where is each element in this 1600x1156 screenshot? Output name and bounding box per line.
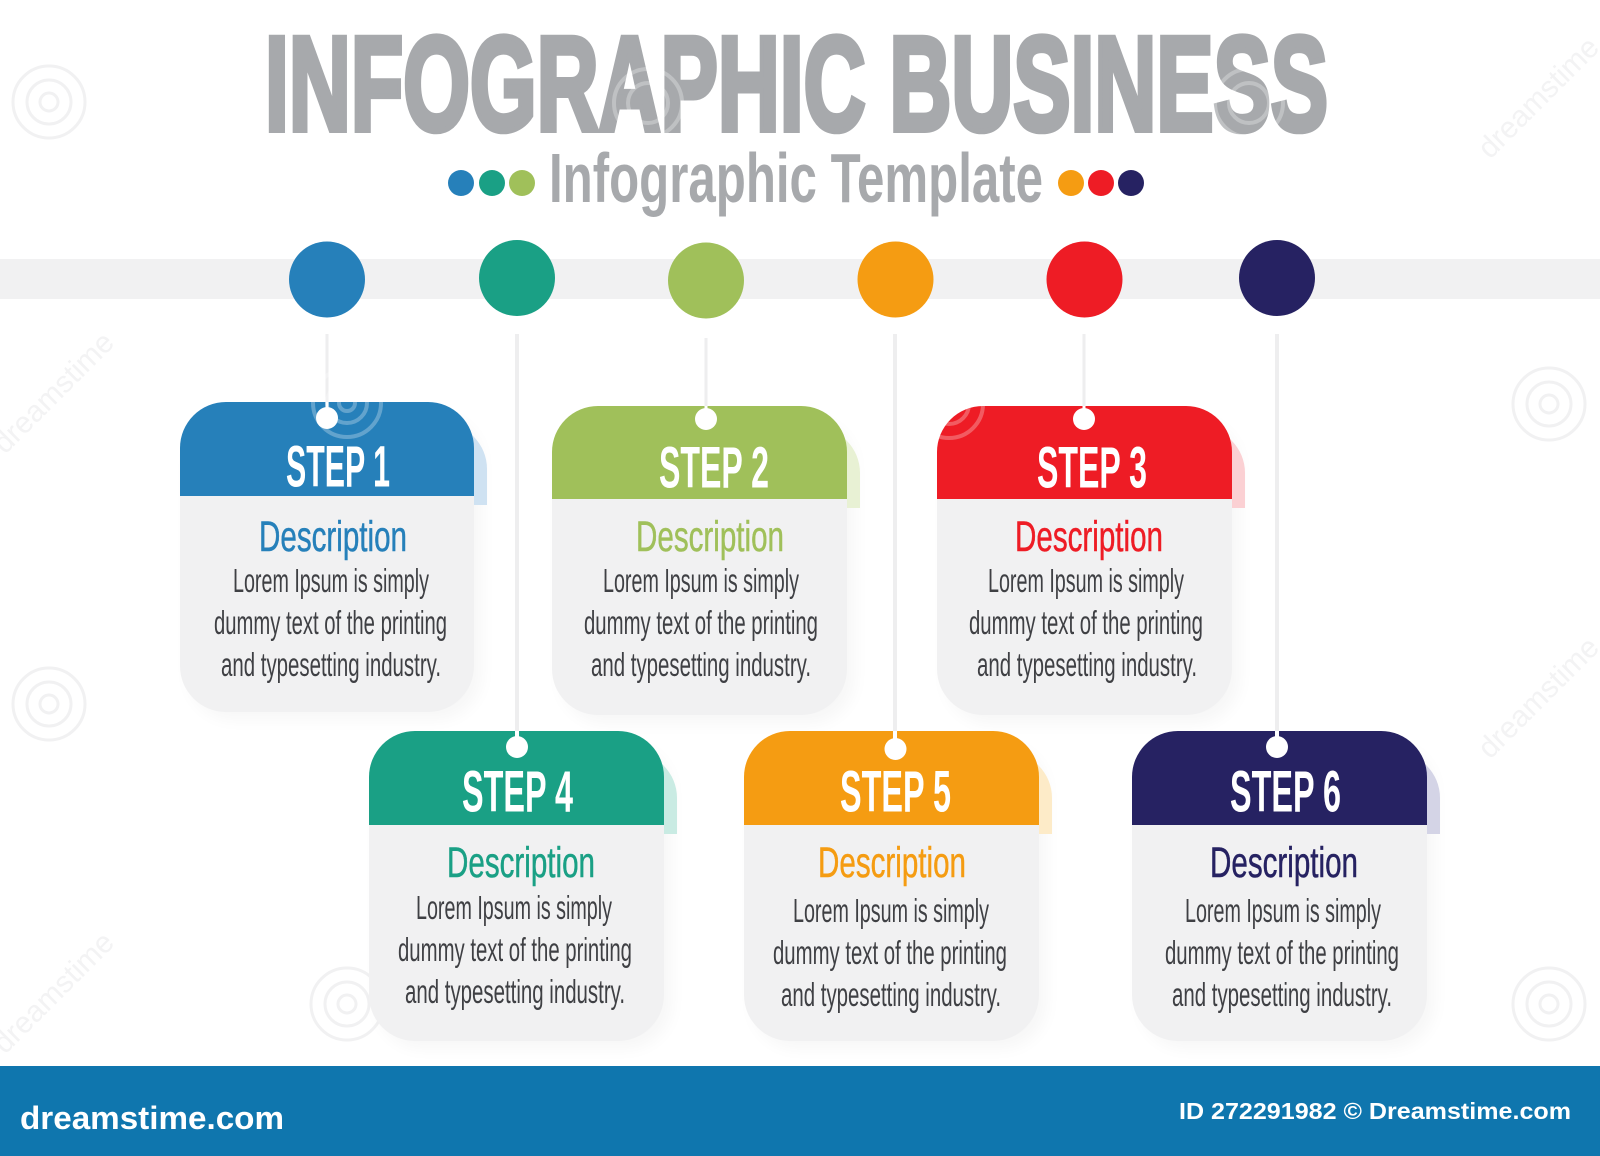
panel: step 5 [744,731,1052,1049]
timeline circle 3 [1046,242,1122,318]
timeline circle 2 [668,242,744,318]
timeline circle 5 [858,242,934,318]
step 2 text: dummy text of the printing [584,604,818,641]
step 6 text: dummy text of the printing [1165,934,1399,971]
step 2 text: Lorem Ipsum is simply [603,562,799,599]
step 6 text [1165,892,1399,1013]
connector step 6 [1266,334,1288,758]
step 5 text [773,892,1007,1013]
step 6 text: and typesetting industry. [1172,976,1392,1013]
step 2 label: STEP 2 [659,436,769,500]
step 3 label: STEP 3 [1037,436,1147,500]
step 6 heading: Description [1210,839,1358,887]
subtitle: Infographic Template [549,139,1043,217]
panel: step 2 [552,406,860,724]
step 5 label: STEP 5 [840,760,951,824]
step 1 text: dummy text of the printing [214,604,447,641]
decorative dots left [448,170,535,196]
connector step 3 [1073,334,1095,430]
step 1 heading: Description [259,513,407,561]
step 1 text: Lorem Ipsum is simply [233,562,429,599]
step 3 heading: Description [1015,513,1163,561]
connector step 5 [884,334,906,760]
step 4 text [398,889,632,1010]
connector step 4 [506,334,528,758]
step 2 heading: Description [636,513,784,561]
step 2 text [584,562,818,683]
step 6 text: Lorem Ipsum is simply [1185,892,1381,929]
step 4 header [369,731,664,825]
step 4 text: Lorem Ipsum is simply [416,889,612,926]
step 1 label: STEP 1 [286,434,390,500]
step 3 header [937,406,1232,499]
step 3 text: dummy text of the printing [969,604,1203,641]
connector step 1 [316,334,338,429]
step 3 text: Lorem Ipsum is simply [988,562,1184,599]
panel: step 4 [369,731,677,1049]
subtitle row [448,139,1144,217]
step 2 header [552,406,847,499]
timeline circle 4 [479,240,555,316]
connector step 2 [695,338,717,430]
step 1 header [180,402,474,496]
step 4 label: STEP 4 [462,760,573,824]
step 1 text: and typesetting industry. [221,646,441,683]
step 5 text: and typesetting industry. [781,976,1001,1013]
decorative dots right [1058,170,1144,196]
step 5 text: dummy text of the printing [773,934,1007,971]
step 1 text [214,562,447,683]
step 6 header [1132,731,1427,825]
step 5 heading: Description [818,839,966,887]
step 5 text: Lorem Ipsum is simply [793,892,989,929]
step 4 text: and typesetting industry. [405,973,625,1010]
step 2 text: and typesetting industry. [591,646,811,683]
panel: step 6 [1132,731,1440,1049]
footer logo: dreamstime.com [20,1100,284,1136]
step 4 heading: Description [447,839,595,887]
footer credit: ID 272291982 © Dreamstime.com [1179,1098,1571,1124]
footer banner [0,1066,1600,1156]
panel: step 1 [180,402,487,720]
step 4 text: dummy text of the printing [398,931,632,968]
step 3 text: and typesetting industry. [977,646,1197,683]
panel: step 3 [937,406,1245,724]
timeline circle 6 [1239,240,1315,316]
timeline circle 1 [289,242,365,318]
step 5 header [744,731,1039,825]
timeline band [0,259,1600,299]
step 6 label: STEP 6 [1230,760,1341,824]
step 3 text [969,562,1203,683]
